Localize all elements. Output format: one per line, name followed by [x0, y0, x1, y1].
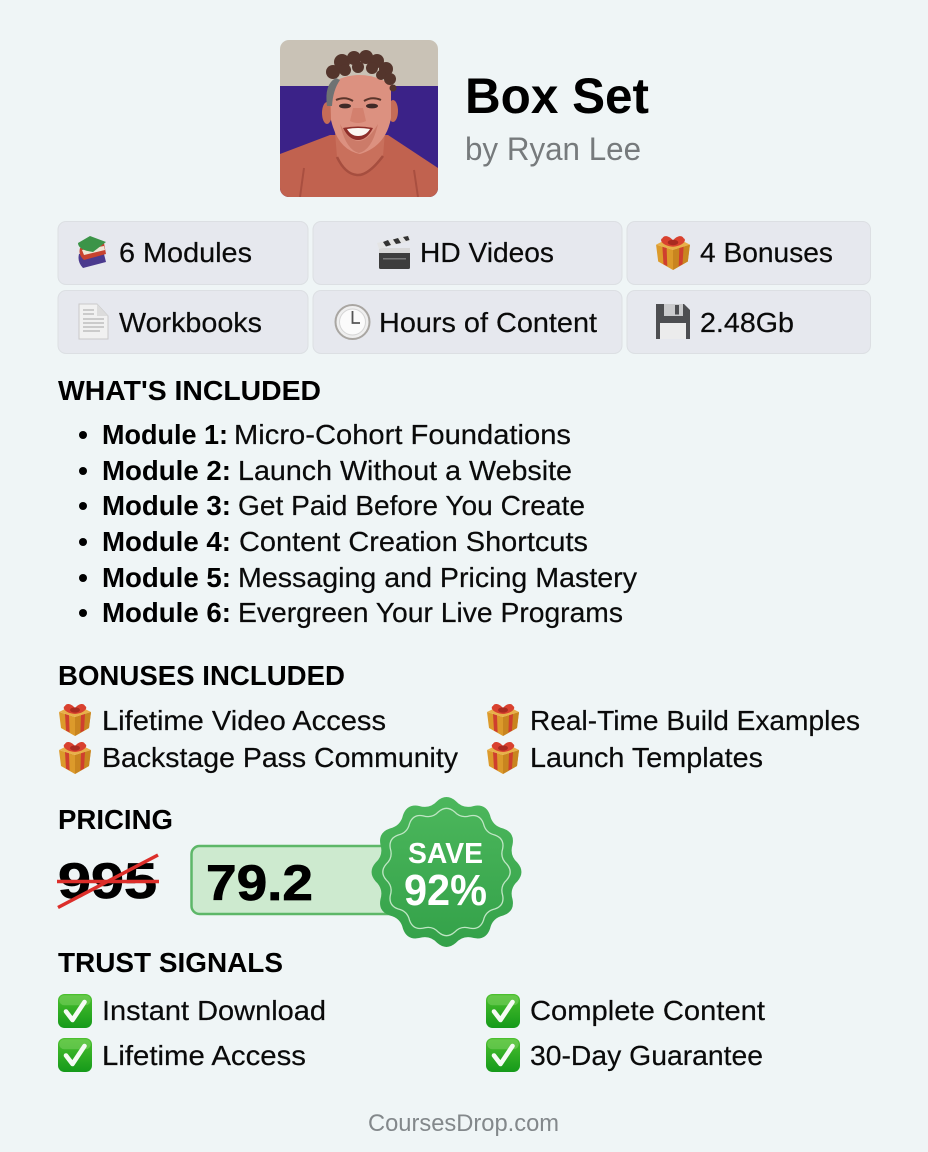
module list: Module 4:: [102, 526, 231, 557]
bonus: backstage pass community: Backstage Pass Community: [102, 742, 458, 773]
module list: Messaging and Pricing Mastery: [238, 562, 637, 593]
chip: modules: 6 Modules: [119, 237, 252, 268]
bonus list: [59, 704, 860, 774]
bonus: launch templates: Launch Templates: [530, 742, 763, 773]
chip: bonuses: [627, 222, 870, 284]
module list: Evergreen Your Live Programs: [238, 597, 623, 628]
heading: what's included: WHAT'S INCLUDED: [58, 375, 321, 406]
module list: Module 2:: [102, 455, 231, 486]
icon: gift: [656, 236, 690, 270]
trust: 30-day guarantee: 30-Day Guarantee: [530, 1040, 763, 1071]
photo: portrait of Ryan Lee: [280, 40, 438, 197]
author: by Ryan Lee: [465, 131, 641, 167]
icon: floppy disk: [656, 304, 690, 339]
chip: workbooks: Workbooks: [119, 307, 262, 338]
trust: lifetime access: Lifetime Access: [102, 1040, 306, 1071]
heading: bonuses included: BONUSES INCLUDED: [58, 660, 345, 691]
bonus: lifetime video access: Lifetime Video Access: [102, 705, 386, 736]
save badge: 92%: [404, 866, 487, 915]
chip: videos: HD Videos: [420, 237, 554, 268]
trust signals list: [58, 994, 765, 1072]
chip: size: 2.48Gb: [700, 307, 794, 338]
title: Box Set: [465, 68, 649, 124]
chip: hours: Hours of Content: [379, 307, 597, 338]
chip: size: [627, 290, 870, 354]
save badge: [372, 797, 521, 947]
icon: document: [79, 304, 108, 339]
chip: bonuses: 4 Bonuses: [700, 237, 833, 268]
module list: Module 1:: [102, 419, 228, 450]
chip: modules: [58, 222, 308, 284]
module list: Module 6:: [102, 597, 231, 628]
bonus: real-time build examples: Real-Time Build Examples: [530, 705, 860, 736]
heading: pricing: PRICING: [58, 804, 173, 835]
save badge: SAVE: [408, 838, 483, 870]
new price box: 79.2: [206, 855, 313, 911]
new price box: [192, 846, 422, 914]
module list: Launch Without a Website: [238, 455, 572, 486]
footer: CoursesDrop.com: [368, 1110, 559, 1137]
stats chips: [58, 222, 870, 354]
module list: Get Paid Before You Create: [238, 490, 585, 521]
chip: videos: [313, 222, 622, 284]
trust: complete content: Complete Content: [530, 995, 765, 1026]
old price struck through: 995: [58, 853, 157, 909]
icon: clock: [336, 305, 370, 339]
module list: Content Creation Shortcuts: [239, 526, 588, 557]
icon: clapperboard: [377, 235, 410, 269]
icon: books: [78, 236, 106, 268]
chip: workbooks: [58, 290, 308, 354]
chip: hours: [313, 290, 622, 354]
module list: [79, 419, 637, 628]
module list: Micro-Cohort Foundations: [234, 419, 571, 450]
heading: trust signals: TRUST SIGNALS: [58, 947, 283, 978]
trust: instant download: Instant Download: [102, 995, 326, 1026]
module list: Module 5:: [102, 562, 231, 593]
module list: Module 3:: [102, 490, 231, 521]
